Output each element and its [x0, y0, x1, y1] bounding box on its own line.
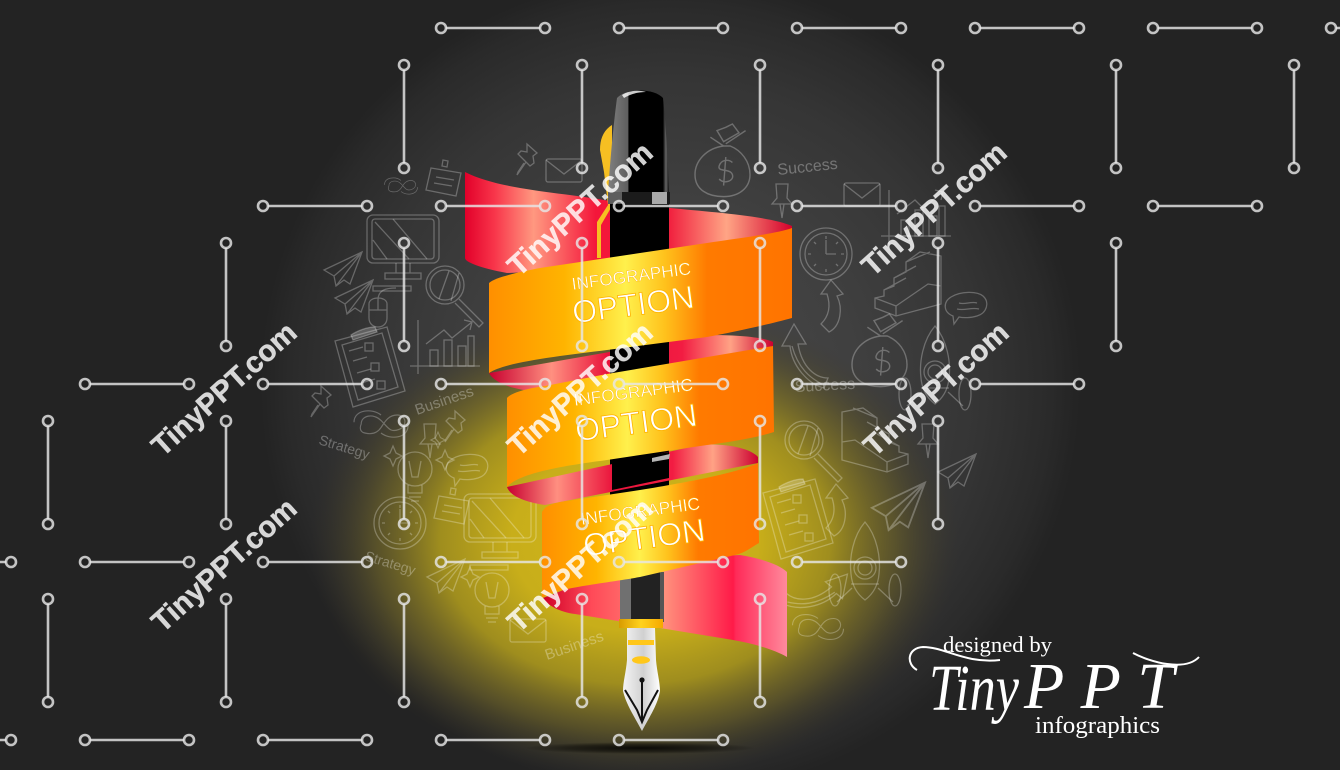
doodles: left cluster: [311, 144, 582, 642]
cap ring: [608, 192, 670, 204]
barrel through gap 2: [612, 452, 669, 490]
designer credit: designed by: [943, 632, 1052, 657]
watermarks: TinyPPT.com: [145, 316, 303, 463]
band 2 label: INFOGRAPHIC: [572, 374, 694, 410]
pen barrel: [610, 202, 669, 502]
doodle labels: [317, 156, 856, 664]
barrel ring in gap 2: [652, 454, 670, 462]
band 2 label: OPTION: [573, 397, 699, 448]
pen section over bottom ribbon: [619, 572, 664, 628]
doodles: right cluster: [695, 124, 987, 639]
band 1 label: OPTION: [570, 279, 696, 330]
ribbon: top back section: [465, 172, 792, 273]
doodle labels: Business: [413, 383, 476, 419]
pen nib: [623, 628, 660, 731]
fountain pen: [597, 90, 670, 731]
ribbon band 2: [507, 346, 774, 487]
doodle labels: Success: [794, 376, 856, 396]
ribbon: inner section 2: [489, 335, 773, 392]
gold ring: [619, 619, 663, 628]
ribbon: bottom section: [543, 555, 787, 657]
ribbon band 1: [489, 228, 792, 373]
doodle labels: Business: [543, 628, 606, 664]
ground shadow: [525, 742, 755, 754]
ribbon: inner section 3: [507, 445, 758, 505]
doodle labels: Success: [777, 156, 839, 179]
band 3 label: INFOGRAPHIC: [579, 493, 701, 529]
doodle labels: Strategy: [363, 548, 418, 578]
watermarks: TinyPPT.com: [501, 492, 659, 639]
watermarks: TinyPPT.com: [145, 492, 303, 639]
band 3 label: OPTION: [581, 512, 707, 563]
barrel through gap 1: [610, 340, 669, 376]
band 2 label: [572, 374, 699, 448]
designer credit: [910, 632, 1199, 739]
pen section: [619, 560, 664, 622]
pen cap: [608, 90, 669, 194]
band 1 label: INFOGRAPHIC: [570, 258, 692, 294]
designer credit: infographics: [1035, 713, 1160, 739]
pen clip: [597, 125, 612, 258]
ribbon band 3: [542, 463, 759, 598]
watermarks: TinyPPT.com: [501, 316, 659, 463]
doodle labels: Strategy: [317, 432, 372, 462]
watermarks: [145, 136, 1015, 639]
watermarks: TinyPPT.com: [855, 136, 1013, 283]
watermarks: TinyPPT.com: [857, 316, 1015, 463]
designer credit: Tiny: [929, 652, 1020, 725]
designer credit: PPT: [1023, 650, 1178, 723]
watermarks: TinyPPT.com: [501, 136, 659, 283]
cap highlight: [622, 91, 646, 98]
